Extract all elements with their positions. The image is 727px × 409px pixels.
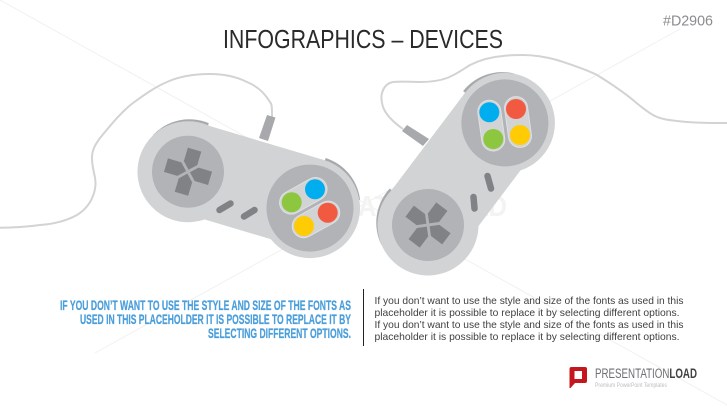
blue headline text: USED IN THIS PLACEHOLDER IT IS POSSIBLE TO REPLACE IT BY — [80, 311, 351, 327]
start and select buttons — [474, 176, 491, 208]
controller body — [125, 107, 373, 271]
left controller — [125, 107, 373, 271]
cable connector — [259, 115, 276, 141]
right controller cable — [381, 55, 727, 129]
blue headline text — [60, 297, 351, 341]
logo tagline: Premium PowerPoint Templates — [595, 383, 667, 389]
blue headline text: SELECTING DIFFERENT OPTIONS. — [208, 325, 351, 341]
start and select buttons — [220, 204, 254, 216]
right controller — [355, 51, 575, 296]
left controller cable — [0, 74, 272, 228]
title: INFOGRAPHICS – DEVICES — [223, 26, 503, 54]
body text: If you don’t want to use the style and size of the fonts as used in this — [374, 319, 684, 331]
blue headline text: IF YOU DON’T WANT TO USE THE STYLE AND SIZE OF THE FONTS AS — [60, 297, 351, 313]
colored buttons — [479, 102, 499, 122]
vertical divider — [363, 289, 364, 346]
button pills — [275, 173, 344, 242]
body text: placeholder it is possible to replace it by selecting different options. — [374, 307, 680, 319]
body text: placeholder it is possible to replace it by selecting different options. — [374, 331, 680, 343]
body text: If you don’t want to use the style and size of the fonts as used in this — [374, 295, 684, 307]
button pills — [476, 95, 533, 152]
controller body — [355, 51, 575, 296]
product code: #D2906 — [663, 12, 713, 30]
logo wordmark: PRESENTATIONLOAD — [595, 366, 697, 381]
cable connector — [402, 125, 429, 146]
logo icon — [570, 367, 587, 388]
logo — [570, 366, 697, 389]
watermark: PRESENTATIONLOAD — [240, 191, 507, 223]
body text — [374, 295, 684, 343]
colored buttons — [305, 179, 325, 199]
